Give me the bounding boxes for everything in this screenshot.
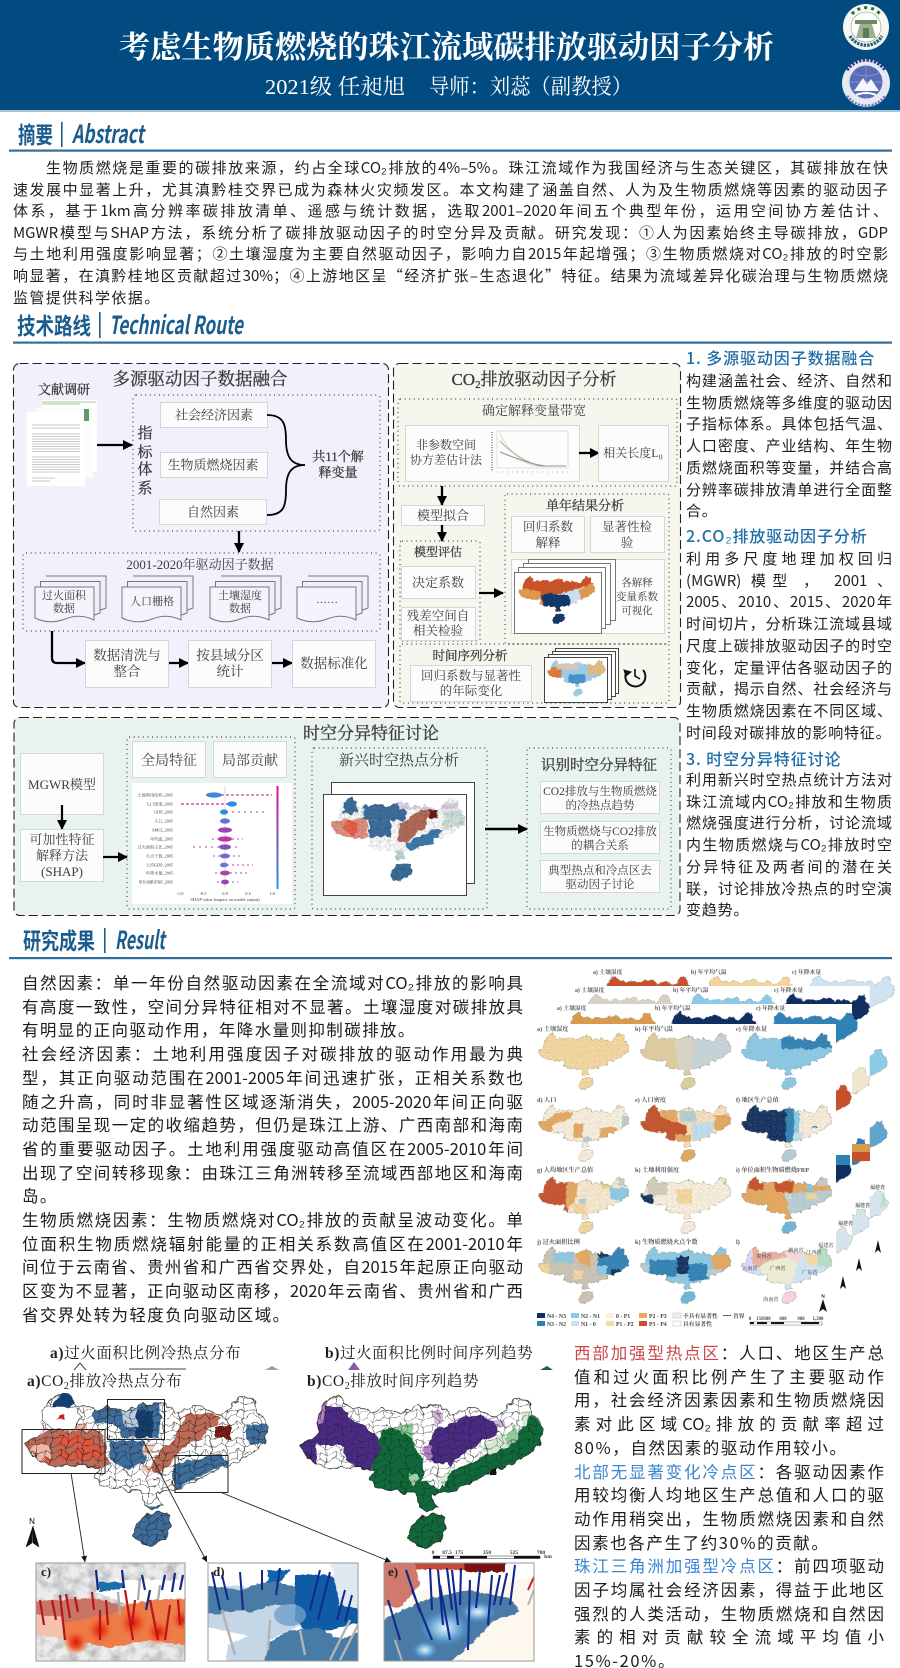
text block: result factors: 有明显的正向驱动作用，年降水量则抑制碳排放。 (22, 1017, 416, 1041)
map f GDP (741, 1105, 832, 1164)
panel labels: f) 地区生产总值 (736, 1096, 780, 1104)
indicator system group: 自然因素 (187, 504, 239, 520)
heading: step 3: 3. 时空分异特征讨论 (686, 746, 841, 770)
global and local feature group (127, 737, 295, 909)
legend: 具有显著性 (683, 1320, 712, 1328)
text block: step 2: 时间切片，分析珠江流域县域 (686, 613, 892, 634)
scale bar: 300 (763, 1317, 771, 1322)
panel labels: i) 单位面积生物质燃烧FRP (736, 1166, 809, 1174)
map a: CO2 cold and hot spots (25, 1393, 268, 1550)
text block: result factors: 社会经济因素：土地利用强度因子对碳排放的驱动作用最为典 (22, 1041, 523, 1065)
header banner (0, 0, 900, 112)
driver data 2001-2020 group: 数据 (229, 601, 251, 615)
chart: SHAP beeswarm: 火点个数_2005 (146, 852, 173, 860)
text block: step 3: 联，讨论排放冷热点的时空演 (686, 878, 892, 899)
text block: step 2: 时间段对碳排放的影响特征。 (686, 722, 891, 743)
text block: hot and cold spot regions: 用较均衡人均地区生产总值和人口的驱 (574, 1482, 884, 1506)
driver data 2001-2020 group (23, 553, 380, 631)
single year result group: 解释 (535, 536, 561, 550)
hidden layer titles: 2 (345, 1381, 350, 1392)
icon: north arrow: N (821, 1295, 825, 1300)
legend: 不具有显著性 (683, 1312, 718, 1320)
bandwidth group: 非参数空间 (416, 437, 476, 452)
box: model fitting (402, 506, 484, 526)
scale bar: 525 (510, 1550, 518, 1556)
panel labels (536, 1025, 809, 1246)
text block: result factors: 型，其正向驱动范围在2001-2005年间迅速扩张，正相关系数也 (22, 1065, 523, 1089)
chart: SHAP beeswarm: 1.0 (269, 891, 276, 896)
advisor: 导师：刘蕊（副教授） (429, 75, 632, 99)
heading: Result (9, 921, 892, 959)
front layer page (535, 1024, 836, 1330)
icon: north arrow (26, 1517, 39, 1547)
hidden layer titles (27, 1344, 533, 1392)
model evaluation group: 相关检验 (413, 623, 463, 638)
text block: abstract: 监管提供科学依据。 (13, 287, 161, 308)
text block: hot and cold spot regions: 西部加强型热点区：人口、地区生产总 (574, 1340, 884, 1364)
panel heading: 时空分异特征讨论 (303, 724, 439, 743)
model evaluation group: 模型评估 (414, 544, 462, 559)
bandwidth group: 确定解释变量带宽 (482, 403, 586, 418)
text block: hot and cold spot regions: 强烈的人类活动，生物质燃烧和自然因 (574, 1601, 884, 1625)
chart: SHAP beeswarm: SHAP value (impact on model output) (190, 897, 260, 902)
province labels: 云南省 (742, 1264, 758, 1272)
indicator system group: 体 (137, 461, 153, 478)
province labels: 海南省 (763, 1295, 779, 1303)
legend (537, 1312, 745, 1328)
panel: multi-source driver data fusion (14, 364, 388, 708)
heading: Abstract (9, 115, 892, 152)
time-series group (400, 644, 669, 703)
heading: Result: 研究成果 (23, 922, 95, 956)
text block: hot and cold spot regions: 动作用稍突出，生物质燃烧因素和自然 (574, 1506, 884, 1530)
arrow: to model fitting (441, 486, 443, 505)
hidden layer titles: b)CO (307, 1373, 345, 1390)
inset d (208, 1562, 358, 1662)
arrow: to county statistics (169, 662, 188, 664)
panel labels: j) 过火面积比例 (536, 1238, 580, 1246)
box: SHAP (20, 830, 104, 882)
single year result group: 显著性检 (602, 519, 652, 534)
text block: abstract: 体系，基于1km高分辨率碳排放清单、遥感与统计数据，选取2001–2020年间五个典型年份，运用空间协方差估计、 (13, 200, 888, 221)
text block: step 1: 子指标体系。具体包括气温、 (686, 413, 892, 434)
icon: north arrow (819, 1295, 827, 1312)
legend: 0 - P1 (616, 1314, 630, 1320)
time-series map stack (544, 648, 618, 702)
map k fire count (640, 1247, 731, 1306)
text block: hot and cold spot regions: 北部无显著变化冷点区：各驱动因素作 (574, 1459, 884, 1483)
panel labels: l) (736, 1239, 740, 1246)
legend: N2 - N1 (581, 1314, 600, 1320)
small curve chart (492, 431, 568, 472)
hidden layer titles: 排放时间序列趋势 (350, 1372, 479, 1390)
chart: SHAP beeswarm: 0.0 (222, 891, 229, 896)
heading: Technical Route: Technical Route (109, 306, 245, 342)
time-series group: 的年际变化 (440, 683, 503, 698)
identification group: 的耦合关系 (571, 838, 629, 852)
legend: P3 - P4 (649, 1322, 667, 1328)
indicator system group (133, 395, 380, 531)
legend: P2 - P3 (649, 1314, 667, 1320)
driver data 2001-2020 group: 土壤湿度 (218, 588, 262, 602)
text block: step 1: 分辨率碳排放清单进行全面整 (686, 479, 892, 500)
text block: hot and cold spot regions: 因素也各产生了约30%的贡献。 (574, 1530, 830, 1554)
icon: institute logo (842, 59, 890, 107)
single year result group: 可视化 (621, 604, 653, 617)
box: SHAP: (SHAP) (41, 864, 83, 879)
arrow: to standardisation (272, 662, 292, 664)
panel: CO2 emission driver analysis (394, 364, 680, 708)
icon: north arrow: N (29, 1517, 35, 1526)
box: standardisation: 数据标准化 (300, 655, 368, 671)
identification group: 生物质燃烧与CO2排放 (543, 824, 657, 838)
hidden layer titles: a)CO (27, 1373, 64, 1390)
panel heading: 2 (475, 379, 481, 391)
text block: abstract: 与土地利用强度影响显著；②土壤湿度为主要自然驱动因子，影响力自2015年起增强；③生物质燃烧对CO₂排放的时空影 (13, 243, 888, 264)
chart: SHAP beeswarm: -0.5 (199, 891, 207, 896)
inset c (36, 1562, 186, 1662)
panel labels: b) 年平均气温 (635, 1025, 674, 1033)
map c precipitation (741, 1033, 832, 1091)
legend: P1 - P2 (616, 1322, 634, 1328)
single year result group: 回归系数 (523, 519, 573, 534)
arrow: to SHAP (61, 805, 63, 829)
emerging hotspot group: 新兴时空热点分析 (339, 751, 459, 769)
time-series group: 时间序列分析 (432, 648, 508, 663)
text block: hot and cold spot regions: 值和过火面积比例产生了主要驱动作 (574, 1364, 884, 1388)
scale bar: 900 (797, 1317, 805, 1322)
map l provinces (741, 1247, 832, 1306)
title: 考虑生物质燃烧的珠江流域碳排放驱动因子分析 (119, 22, 774, 67)
single year result group: 各解释 (621, 576, 653, 589)
single year result group: 变量系数 (616, 590, 658, 603)
arrows to insets (71, 1439, 391, 1562)
text block: step 1: 质燃烧面积等变量，并结合高 (686, 457, 892, 478)
scale bar: km (544, 1554, 552, 1560)
single year result group: 验 (621, 536, 633, 550)
heading: step 1: 1. 多源驱动因子数据融合 (686, 345, 875, 369)
scale bar: 0 (749, 1317, 752, 1322)
heading: Abstract: 摘要 (18, 116, 53, 150)
arrow: to indicator system (97, 444, 132, 446)
coefficient map stack (514, 560, 616, 634)
panel heading: 排放驱动因子分析 (481, 370, 617, 389)
panel labels: c) 年降水量 (736, 1025, 767, 1033)
text block: hot and cold spot regions: 珠江三角洲加强型冷点区：前四项驱动 (574, 1553, 884, 1577)
panel heading: CO (451, 370, 475, 389)
text block: step 3: 内生物质燃烧与CO₂排放时空 (686, 834, 892, 855)
scale bar: 1,200 (813, 1317, 824, 1322)
chart: SHAP beeswarm: 人均GDP_2005 (146, 862, 173, 868)
box: data cleaning: 整合 (114, 663, 141, 679)
identification group: 典型热点和冷点区去 (548, 863, 652, 877)
text block: abstract (13, 157, 888, 308)
back layer 3: c) 年降水量 (774, 986, 803, 994)
back layer 4: a) 土壤湿度 (593, 968, 623, 976)
text block: step 1: 人口密度、产业结构、年生物 (686, 435, 892, 456)
literature review thumbnail: 文献调研 (38, 382, 90, 397)
text block: step 3: 利用新兴时空热点统计方法对 (686, 769, 892, 790)
arrow: to identification (485, 828, 527, 830)
arrow: to single year (479, 592, 503, 594)
text block: result factors: 有高度一致性，空间分异特征相对不显著。土壤湿度对碳排放具 (22, 994, 523, 1018)
author: 2021级 任昶旭 (265, 75, 405, 99)
back layer 4: 福建省 (870, 1184, 886, 1191)
box: county statistics: 按县域分区 (196, 647, 264, 663)
back layer 4 (591, 968, 895, 1273)
model evaluation group (400, 541, 480, 641)
heading: Technical Route (13, 306, 892, 344)
indicator system group: 系 (137, 480, 153, 497)
scale bar: 175 (455, 1550, 463, 1556)
text block: step 3: 珠江流域内CO₂排放和生物质 (686, 791, 892, 812)
text block: step 3: 分异特征及两者间的潜在关 (686, 856, 892, 877)
box: county statistics: 统计 (216, 663, 244, 679)
text block: step 2: 变化，定量评估各驱动因子的 (686, 657, 892, 678)
legend: N1 - 0 (581, 1322, 596, 1328)
box: MGWR model: MGWR模型 (28, 777, 96, 792)
text block: hot and cold spot regions: 因子均属社会经济因素，得益于此地区 (574, 1577, 884, 1601)
text block: abstract: MGWR模型与SHAP方法，系统分析了碳排放驱动因子的时空分异及贡献。研究发现：①人为因素始终主导碳排放，GDP (13, 222, 888, 243)
literature review thumbnail (27, 382, 97, 486)
scale bar: 0 (432, 1550, 435, 1556)
text block: step 1: 构建涵盖社会、经济、自然和 (686, 370, 892, 391)
panel labels: g) 人均地区生产总值 (537, 1166, 594, 1174)
text block: result factors: 动范围呈现一定的收缩趋势，但仍是珠江上游、广西南部和海南 (22, 1112, 523, 1136)
identification group: 的冷热点趋势 (566, 798, 635, 812)
single year result group (505, 494, 669, 644)
text block: result factors: 随之升高，同时非显著性区域逐渐消失，2005-2020年间正向驱 (22, 1089, 523, 1113)
driver data 2001-2020 group: 人口栅格 (130, 594, 174, 608)
indicator system group: 社会经济因素 (175, 408, 253, 422)
hidden layer titles: 排放冷热点分布 (69, 1372, 182, 1390)
province labels: 贵州省 (756, 1252, 772, 1260)
text block: step 1: 生物质燃烧等多维度的驱动因 (686, 392, 892, 413)
map j burned area (538, 1247, 629, 1305)
text block: step 3: 燃烧强度进行分析，讨论流域 (686, 812, 892, 833)
indicator system group: 标 (137, 444, 153, 461)
chart: SHAP beeswarm: 过火面积占比_2005 (137, 844, 173, 850)
box: standardisation (292, 640, 376, 688)
text block: result factors: 间位于云南省、贵州省和广西省交界处，自2015年起原正向驱动 (22, 1254, 523, 1278)
text block: step 3: 变趋势。 (686, 899, 749, 920)
callout boxes (22, 1400, 228, 1492)
single year result group: 单年结果分析 (546, 498, 624, 513)
box: county statistics (188, 640, 272, 688)
text block: result factors: 出现了空间转移现象：由珠江三角洲转移至流域西部地区和海南 (22, 1160, 523, 1184)
global and local feature group: 局部贡献 (222, 752, 278, 769)
box: SHAP: 可加性特征 (29, 832, 95, 847)
back layer 2: a) 土壤湿度 (557, 1004, 587, 1012)
legend: 省界 (733, 1312, 745, 1320)
scale bar: 350 (483, 1550, 491, 1556)
indicator system group: 释变量 (318, 465, 358, 480)
chart: SHAP beeswarm: 人口_2005 (154, 818, 173, 824)
back layer 4: c) 年降水量 (792, 968, 821, 976)
chart: SHAP beeswarm: 年降水量_2005 (146, 870, 173, 876)
heading: step 2: 2.CO₂排放驱动因子分析 (686, 523, 868, 547)
icon: Yunnan University logo (843, 4, 889, 50)
text block: hot and cold spot regions (574, 1340, 884, 1668)
chart: SHAP beeswarm: 0.5 (245, 891, 252, 896)
panel labels: d) 人口 (537, 1097, 556, 1104)
map e population density (640, 1105, 731, 1164)
indicator system group: 生物质燃烧因素 (167, 458, 259, 472)
model evaluation group: 决定系数 (412, 575, 464, 590)
legend: N3 - N2 (547, 1322, 566, 1328)
panel labels: k) 生物质燃烧火点个数 (635, 1238, 699, 1246)
chart: SHAP beeswarm: GDP_2005 (154, 810, 173, 814)
back layer 3: b) 年平均气温 (673, 986, 709, 994)
chart: SHAP beeswarm: 人口密度_2005 (146, 800, 173, 808)
back layer 2 (555, 1004, 858, 1314)
text block: step 2 (686, 548, 892, 743)
panel: MGWR coefficient map stack (535, 968, 895, 1330)
map a soil moisture (538, 1033, 629, 1091)
text block: result factors: 省交界处转为轻度负向驱动区域。 (22, 1302, 290, 1326)
back layer 2: 福建省 (838, 1220, 854, 1227)
chart: SHAP beeswarm: -1.0 (176, 891, 184, 896)
identification group: 驱动因子讨论 (566, 877, 635, 891)
text block: result factors (22, 970, 523, 1326)
back layer 2: c) 年降水量 (756, 1004, 785, 1012)
text block: hot and cold spot regions: 80%，自然因素的驱动作用较小。 (574, 1435, 848, 1459)
driver data 2001-2020 group: 过火面积 (42, 588, 87, 602)
map g GDP per capita (538, 1177, 629, 1236)
inset e (384, 1562, 534, 1662)
text block: abstract: 生物质燃烧是重要的碳排放来源，约占全球CO₂排放的4%–5%。珠江流域作为我国经济与生态关键区，其碳排放在快 (46, 157, 888, 178)
province labels: 福建省 (818, 1241, 834, 1249)
time-series group: 回归系数与显著性 (421, 668, 521, 683)
text block: step 2: 利用多尺度地理加权回归 (686, 548, 892, 569)
bandwidth group: 协方差估计法 (410, 452, 483, 467)
back layer 2: b) 年平均气温 (655, 1004, 691, 1012)
box: data cleaning: 数据清洗与 (93, 647, 161, 663)
arrow: down to data (238, 531, 240, 552)
panel labels: a) 土壤湿度 (537, 1025, 569, 1033)
scale bar: 150 (756, 1317, 764, 1322)
chart: SHAP beeswarm: 单位面积FRP_2005 (138, 878, 173, 886)
map d population (538, 1105, 629, 1163)
driver data 2001-2020 group: 数据 (53, 601, 75, 615)
arrow: to cleaning (52, 631, 85, 663)
arrow: to model evaluation (441, 525, 443, 541)
indicator system group: 共11个解 (312, 449, 364, 464)
text block: result factors: 省的重要驱动因子。土地利用强度驱动高值区在2005-2010年间 (22, 1136, 523, 1160)
inset d: d) (213, 1564, 225, 1579)
scale bar (432, 1550, 552, 1560)
box: SHAP: 解释方法 (36, 848, 89, 863)
arrow: to global and local features (103, 856, 127, 858)
text block: step 3 (686, 769, 892, 920)
panel labels: h) 土地利用强度 (635, 1166, 680, 1174)
icon: clock with arrow (624, 669, 645, 686)
scale bar: 87.5 (442, 1550, 452, 1556)
text block: abstract: 速发展中显著上升，尤其滇黔桂交界已成为森林火灾频发区。本文构建了涵盖自然、人为及生物质燃烧等因素的驱动因子 (13, 179, 888, 200)
panel heading: 多源驱动因子数据融合 (112, 369, 288, 389)
hidden layer titles: a)过火面积比例冷热点分布 (50, 1344, 241, 1362)
chart: SHAP beeswarm: SMCI_2005 (152, 828, 173, 832)
panel labels: e) 人口密度 (635, 1096, 667, 1104)
identification group: CO2排放与生物质燃烧 (543, 784, 657, 798)
chart: SHAP beeswarm: 土地利用结构_2005 (137, 792, 173, 798)
text block: step 2: 贡献，揭示自然、社会经济与 (686, 678, 892, 699)
box: MGWR model (20, 754, 104, 814)
province labels: 湖南省 (788, 1246, 804, 1254)
map h land use intensity (640, 1177, 731, 1235)
province labels: 江西省 (806, 1248, 822, 1256)
driver data 2001-2020 group: …… (316, 594, 338, 606)
bandwidth group: 相关长度L₀ (603, 445, 663, 460)
model evaluation group: 残差空间自 (407, 608, 469, 623)
chart: SHAP beeswarm (132, 783, 292, 904)
scale bar: 700 (537, 1550, 545, 1556)
map: hotspot (330, 797, 465, 885)
hidden layer titles: 2 (64, 1381, 69, 1392)
hidden layer titles: b)过火面积比例时间序列趋势 (325, 1344, 533, 1362)
legend: N4 - N3 (547, 1314, 566, 1320)
text block: result factors: 生物质燃烧因素：生物质燃烧对CO₂排放的贡献呈波动变化。单 (22, 1207, 523, 1231)
heading: Abstract: Abstract (71, 115, 146, 151)
indicator system group: 指 (137, 425, 153, 442)
text block: result factors: 区变为不显著，正向驱动区南移，2020年云南省、贵州省和广西 (22, 1278, 523, 1302)
back layer 3 (573, 986, 871, 1291)
identification group (527, 748, 671, 909)
text block: hot and cold spot regions: 用，社会经济因素因素和生物质燃烧因 (574, 1387, 884, 1411)
chart: SHAP beeswarm: 年均温_2005 (150, 836, 173, 842)
text block: result factors: 自然因素：单一年份自然驱动因素在全流域对CO₂排放的影响具 (22, 970, 523, 994)
global and local feature group: 全局特征 (141, 752, 197, 769)
text block: step 1: 合。 (686, 500, 718, 521)
province labels: 广东省 (802, 1268, 818, 1276)
back layer 3: a) 土壤湿度 (575, 986, 605, 994)
bandwidth group (398, 399, 677, 486)
panel: hot and cold spot maps (22, 1344, 553, 1668)
text block: step 1 (686, 370, 892, 521)
text block: result factors: 位面积生物质燃烧辐射能量的正相关系数高值区在2001-2010年 (22, 1231, 523, 1255)
back layer 3: 福建省 (855, 1202, 871, 1209)
back layer 4: b) 年平均气温 (691, 968, 727, 976)
identification group: 识别时空分异特征 (541, 756, 657, 774)
inset c: c) (41, 1564, 51, 1579)
province labels: 广西省 (770, 1264, 786, 1272)
panel: spatio-temporal heterogeneity discussion (14, 718, 680, 916)
text block: step 2: 2005、2010、2015、2020年 (686, 591, 892, 612)
province labels (742, 1241, 834, 1303)
text block: hot and cold spot regions: 素的相对贡献较全流域平均值小 (574, 1624, 884, 1648)
scale bar (749, 1317, 824, 1325)
text block: step 2: (MGWR) 模型 ， 2001 、 (686, 570, 892, 591)
text block: result factors: 岛。 (22, 1183, 58, 1207)
driver data 2001-2020 group: 2001-2020年驱动因子数据 (126, 557, 274, 572)
box: data cleaning (86, 640, 168, 688)
heading: Result: Result (115, 921, 167, 957)
text block: hot and cold spot regions: 素对此区域CO₂排放的贡献率超过 (574, 1411, 884, 1435)
text block: abstract: 响显著，在滇黔桂地区贡献超过30%；④上游地区呈“经济扩张–生态退化”特征。结果为流域差异化碳治理与生物质燃烧 (13, 265, 888, 286)
map b temperature (640, 1033, 731, 1091)
map b: CO2 time series trend (300, 1395, 543, 1555)
box: model fitting: 模型拟合 (417, 508, 469, 523)
text block: step 2: 生物质燃烧因素在不同区域、 (686, 700, 892, 721)
scale bar: 600 (779, 1317, 787, 1322)
heading: Technical Route: 技术路线 (17, 307, 91, 341)
emerging hotspot group (312, 748, 487, 909)
text block: step 2: 尺度上碳排放驱动因子的时空 (686, 635, 892, 656)
inset e: e) (388, 1564, 398, 1579)
map i FRP (741, 1177, 832, 1236)
